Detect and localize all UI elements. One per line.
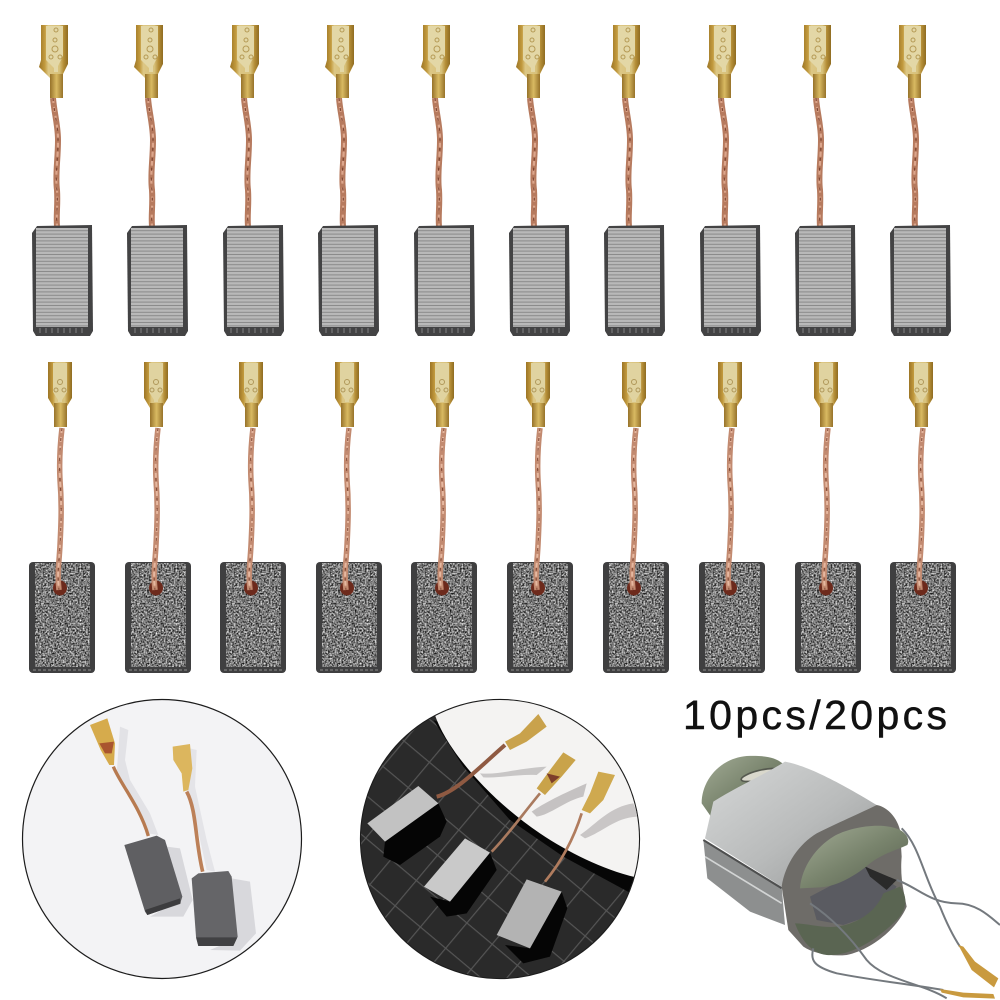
caption: 10pcs/20pcs	[683, 692, 947, 738]
left brush body	[124, 836, 182, 915]
rotor cavity	[810, 867, 897, 925]
circular photo: three brushes on black tiles	[360, 699, 650, 979]
bottom brush 5	[411, 362, 477, 673]
upper silver body	[705, 762, 877, 887]
bottom brush 10	[890, 362, 956, 673]
wire shadows on plate	[480, 767, 547, 777]
top brush 10	[890, 25, 951, 336]
brush 1	[383, 803, 447, 865]
top row: ten carbon brushes without hole	[32, 25, 951, 336]
top brush 5	[414, 25, 475, 336]
brush 2	[430, 853, 497, 917]
bottom brush 8	[699, 362, 765, 673]
bottom brush 4	[316, 362, 382, 673]
back coil	[702, 756, 785, 820]
motor stator photo	[702, 756, 1000, 999]
front ring	[782, 805, 907, 955]
bottom brush 1	[29, 362, 95, 673]
white plate	[435, 700, 650, 878]
shadow under plate	[433, 720, 650, 900]
bottom coil	[795, 887, 905, 955]
bottom brush 6	[507, 362, 573, 673]
top brush 2	[127, 25, 188, 336]
top brush 6	[509, 25, 570, 336]
bottom brush 9	[795, 362, 861, 673]
top brush 4	[318, 25, 379, 336]
lower silver body	[703, 840, 785, 925]
top brush 3	[223, 25, 284, 336]
top brush 8	[700, 25, 761, 336]
top brush 7	[604, 25, 665, 336]
right brush terminal	[173, 744, 192, 792]
top brush 1	[32, 25, 93, 336]
circular photo: two brushes on white	[22, 700, 302, 978]
stator lead wires	[810, 828, 1000, 998]
bottom brush 7	[603, 362, 669, 673]
top brush 9	[795, 25, 856, 336]
right brush body	[192, 871, 238, 946]
bottom brush 2	[125, 362, 191, 673]
bottom brush 3	[220, 362, 286, 673]
left brush wire	[113, 767, 148, 836]
left brush terminal	[90, 718, 115, 765]
wire terminals	[940, 945, 998, 999]
bottom row: ten carbon brushes with wire hole	[29, 362, 956, 673]
top coil	[800, 826, 908, 888]
right brush wire	[187, 792, 203, 872]
brush 3	[505, 892, 567, 963]
